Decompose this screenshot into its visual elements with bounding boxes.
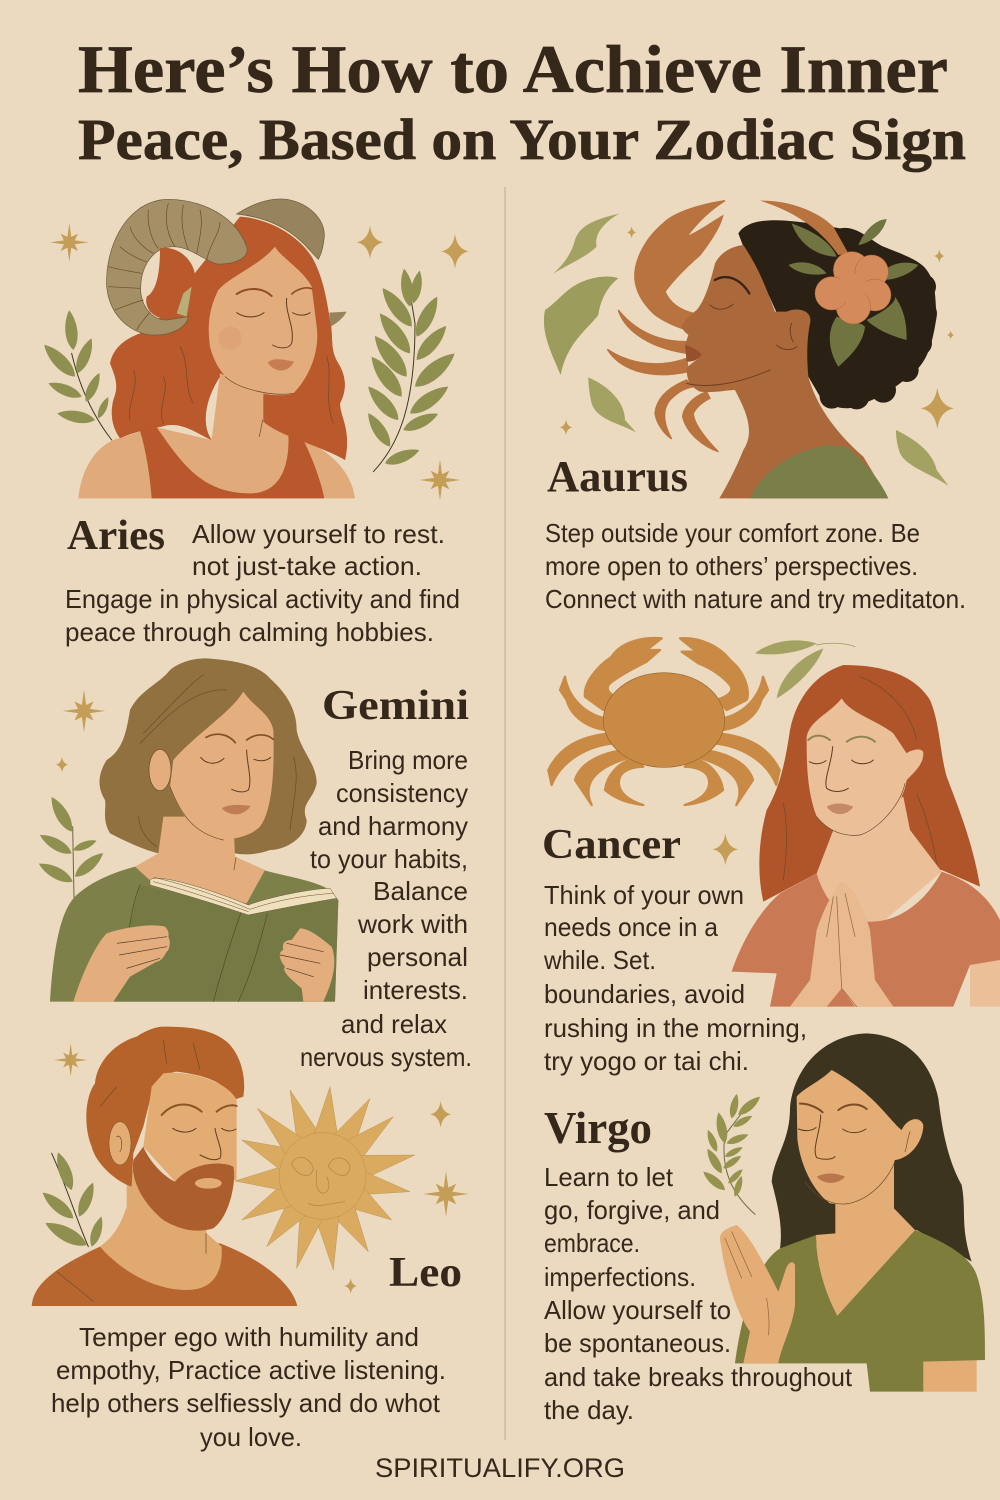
hands xyxy=(790,882,893,1007)
text block: Engage in physical activity and find xyxy=(65,584,460,614)
arm xyxy=(970,957,1000,1007)
icon: right plant xyxy=(363,268,460,472)
icon: flower and foliage xyxy=(788,219,918,367)
face xyxy=(797,1070,923,1204)
text block: nervous system. xyxy=(300,1042,472,1072)
text block: boundaries, avoid xyxy=(544,979,745,1009)
panel: Gemini xyxy=(36,658,472,1072)
icon: leaves xyxy=(544,213,948,486)
face details xyxy=(129,288,333,437)
icon: crab xyxy=(548,638,780,805)
face details xyxy=(685,277,797,385)
text block: you love. xyxy=(200,1422,302,1452)
text block: and take breaks throughout xyxy=(544,1362,853,1392)
hair xyxy=(110,217,347,460)
text block: Bring more xyxy=(348,745,468,775)
icon: sun xyxy=(235,1087,415,1270)
face xyxy=(170,692,274,839)
text block: try yogo or tai chi. xyxy=(544,1046,749,1076)
icon: stars xyxy=(54,1043,469,1294)
panel: Aries xyxy=(39,199,469,647)
arm xyxy=(923,1358,977,1392)
text block: Think of your own xyxy=(544,880,744,910)
ear tip xyxy=(329,312,347,327)
illustration: woman in profile with scorpion claw xyxy=(544,201,954,498)
title: Peace, Based on Your Zodiac Sign xyxy=(78,107,966,172)
text block: Temper ego with humility and xyxy=(79,1322,419,1352)
text block: while. Set. xyxy=(543,945,656,975)
heading: Aaurus xyxy=(547,452,688,501)
text block: Allow yourself to xyxy=(544,1295,731,1325)
illustration: crab and praying woman xyxy=(548,638,1000,1007)
icon: plant xyxy=(39,1150,106,1251)
face details xyxy=(57,1040,237,1302)
text block: to your habits, xyxy=(310,844,468,874)
scorpion claw and legs xyxy=(607,201,725,452)
title: Here’s How to Achieve Inner xyxy=(78,31,948,107)
hands xyxy=(73,925,334,1002)
text block: more open to others’ perspectives. xyxy=(545,551,918,581)
text block: imperfections. xyxy=(544,1262,696,1292)
face details xyxy=(783,677,937,880)
beard xyxy=(133,1147,234,1231)
icon: leaves xyxy=(755,640,855,698)
panel: Taurus xyxy=(544,201,966,614)
neck xyxy=(135,817,265,903)
text block: empothy, Practice active listening. xyxy=(56,1355,446,1385)
panel: Virgo xyxy=(544,1033,985,1425)
face details xyxy=(138,675,296,870)
text block: peace through calming hobbies. xyxy=(65,617,434,647)
text block xyxy=(543,880,807,1076)
shirt xyxy=(732,872,1000,1007)
neck xyxy=(816,1158,915,1316)
text block xyxy=(51,1322,446,1452)
text block xyxy=(544,1162,853,1425)
text block: help others selfiessly and do whot xyxy=(51,1388,441,1418)
shirt xyxy=(750,445,888,498)
neck and chest xyxy=(817,797,942,930)
panel: Cancer xyxy=(542,638,1000,1076)
left horn xyxy=(107,200,247,335)
illustration: woman with ram horns xyxy=(39,199,469,501)
face details xyxy=(798,1104,910,1204)
text block: Balance xyxy=(373,876,468,906)
text block: embrace. xyxy=(544,1228,640,1258)
hair xyxy=(759,665,980,902)
illustration: bearded man and sun xyxy=(32,1027,469,1306)
book pages xyxy=(150,877,337,915)
heading: Virgo xyxy=(544,1102,652,1153)
icon: sparkles xyxy=(560,226,954,435)
text block: the day. xyxy=(544,1395,634,1425)
text block: rushing in the morning, xyxy=(544,1013,807,1043)
hair xyxy=(772,1033,972,1262)
heading: Leo xyxy=(389,1250,462,1296)
icon: stars xyxy=(50,223,469,501)
body xyxy=(50,867,338,1002)
icon: olive sprig xyxy=(701,1093,763,1214)
text block: consistency xyxy=(336,778,468,808)
hair xyxy=(738,220,937,409)
text block: go, forgive, and xyxy=(544,1195,720,1225)
text block: and relax xyxy=(341,1009,447,1039)
heading: Cancer xyxy=(542,822,681,868)
footer source: SPIRITUALIFY.ORG xyxy=(375,1453,625,1483)
text block: personal xyxy=(367,942,468,972)
text block: Learn to let xyxy=(544,1162,674,1192)
text block: interests. xyxy=(363,975,468,1005)
text block: Step outside your comfort zone. Be xyxy=(545,518,920,548)
heading: Gemini xyxy=(322,683,469,729)
neck xyxy=(100,1167,222,1290)
body xyxy=(32,1243,297,1306)
icon: stars xyxy=(56,690,105,773)
text block: not just-take action. xyxy=(192,551,422,581)
shirt xyxy=(735,1230,985,1392)
panel: Leo xyxy=(32,1027,469,1452)
text block xyxy=(300,745,472,1072)
icon: sparkle xyxy=(713,833,738,865)
book xyxy=(115,885,338,1002)
hair curl xyxy=(146,248,195,319)
illustration: woman reading a book xyxy=(36,658,338,1002)
text block: and harmony xyxy=(318,811,468,841)
right horn xyxy=(237,199,324,259)
hand xyxy=(720,1225,795,1363)
heading: Aries xyxy=(67,513,165,559)
ear xyxy=(149,749,171,791)
text block xyxy=(65,519,460,647)
hair xyxy=(86,1027,244,1187)
text block: work with xyxy=(357,909,468,939)
text block: needs once in a xyxy=(544,912,719,942)
text block: Connect with nature and try meditaton. xyxy=(545,584,966,614)
illustration: woman with raised hand xyxy=(701,1033,985,1392)
icon: left plant xyxy=(39,310,112,440)
skin xyxy=(682,245,888,498)
face xyxy=(209,247,317,395)
text block: be spontaneous. xyxy=(544,1328,731,1358)
antenna claw xyxy=(760,201,848,255)
hair xyxy=(100,658,317,854)
title xyxy=(78,31,966,172)
body xyxy=(78,373,355,498)
ear xyxy=(109,1122,131,1165)
face xyxy=(807,698,923,835)
text block: Allow yourself to rest. xyxy=(192,519,445,549)
icon: plant xyxy=(36,794,107,898)
text block xyxy=(545,518,966,614)
face xyxy=(143,1073,237,1183)
